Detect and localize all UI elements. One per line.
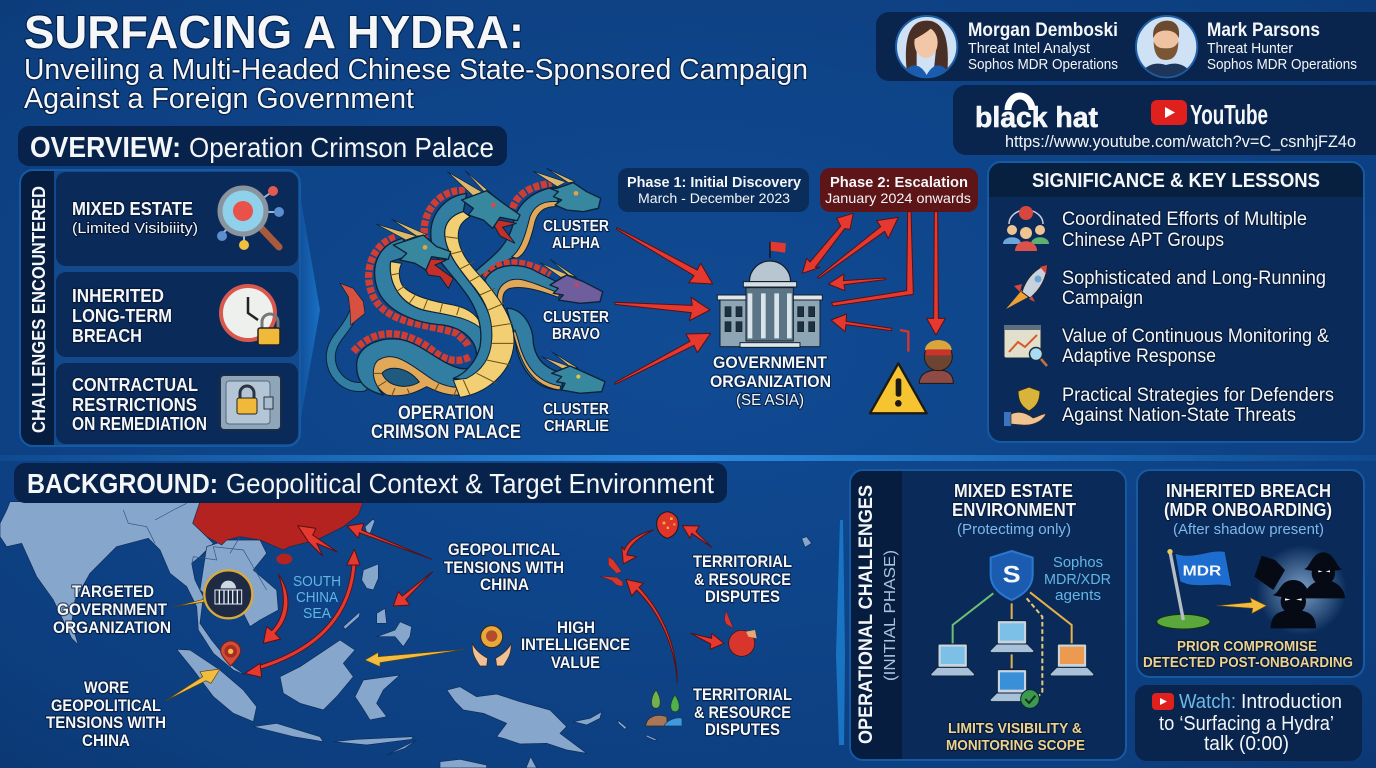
neck: cluster charlie xyxy=(507,308,563,390)
arrow: to Sumatra xyxy=(166,669,220,701)
phase 1 badge: March - December 2023 xyxy=(638,190,790,206)
icon: location pin xyxy=(221,641,241,666)
lesson: continuous monitoring xyxy=(1004,325,1329,367)
heading: overview: Operation Crimson Palace xyxy=(189,132,494,163)
icon: contested territory xyxy=(724,611,757,656)
heading: background xyxy=(14,463,727,503)
land: Pacific islands xyxy=(440,537,812,768)
challenge: inherited breach: BREACH xyxy=(72,326,142,346)
label: wore geopolitical tensions: GEOPOLITICAL xyxy=(51,696,161,715)
label: targeted government organization: TARGETED xyxy=(72,582,154,601)
arrow: double headed sea route xyxy=(245,549,360,677)
neck: left head xyxy=(369,237,487,380)
callout: watch introduction xyxy=(1135,685,1362,761)
label: sophos agents xyxy=(1044,554,1111,604)
label: targeted government organization: GOVERNMENT xyxy=(57,600,168,619)
arrow: to contested territory xyxy=(691,633,724,649)
label: sophos agents: Sophos xyxy=(1053,554,1103,571)
challenge: inherited breach: INHERITED xyxy=(72,286,164,306)
challenge: contractual restrictions xyxy=(56,363,298,444)
speaker text: Mark Parsons: Mark Parsons xyxy=(1207,20,1320,41)
challenge: mixed estate: (Limited Visibiiity) xyxy=(72,220,198,237)
head: cluster bravo xyxy=(540,259,603,303)
label: territorial disputes upper: DISPUTES xyxy=(705,587,780,606)
arrow: elbow from phase 2 xyxy=(832,212,913,306)
heading: mixed estate environment xyxy=(952,481,1076,538)
pointer: government xyxy=(174,599,204,607)
land: Hainan xyxy=(276,554,292,564)
map xyxy=(0,502,812,768)
heading: mixed estate environment: ENVIRONMENT xyxy=(952,500,1076,520)
panel: speakers xyxy=(876,12,1376,81)
label: cluster alpha: ALPHA xyxy=(552,235,600,252)
icon: spy silhouettes xyxy=(1254,552,1345,628)
label: government organization: GOVERNMENT xyxy=(713,353,828,372)
lesson: coordinated efforts: Coordinated Efforts of Multiple xyxy=(1062,209,1307,230)
challenge: contractual restrictions: CONTRACTUAL xyxy=(72,375,198,395)
challenge: inherited breach xyxy=(56,272,298,357)
icon: laptop bottom xyxy=(990,670,1034,702)
caption: limits visibility xyxy=(946,720,1085,754)
label: high intelligence value: HIGH xyxy=(557,618,595,637)
arrow: to Philippines xyxy=(393,572,433,606)
challenge: contractual restrictions: ON REMEDIATION xyxy=(72,414,207,434)
caption: prior compromise xyxy=(1143,638,1353,671)
icon: rocket xyxy=(1006,265,1047,309)
label: targeted government organization: ORGANIZATION xyxy=(53,618,171,637)
label: cluster charlie: CHARLIE xyxy=(544,418,609,435)
lesson: continuous monitoring: Adaptive Response xyxy=(1062,346,1216,367)
icon: MDR flag xyxy=(1157,549,1232,629)
label: cluster charlie: CLUSTER xyxy=(543,401,609,418)
label: sophos agents: MDR/XDR xyxy=(1044,571,1111,588)
lesson: practical strategies: Against Nation-State Threats xyxy=(1062,405,1296,426)
caption: prior compromise: DETECTED POST-ONBOARDING xyxy=(1143,654,1353,671)
label: operation crimson palace: OPERATION xyxy=(398,403,494,424)
title block xyxy=(24,6,808,115)
lesson: practical strategies xyxy=(1004,385,1334,426)
label: government organization xyxy=(710,353,831,409)
arrow: curved toward strait xyxy=(263,574,288,643)
caption: limits visibility: LIMITS VISIBILITY & xyxy=(948,720,1082,737)
icon: government building xyxy=(717,242,822,347)
label: wore geopolitical tensions: CHINA xyxy=(82,731,130,750)
icon: chart with magnifier xyxy=(1004,325,1047,366)
challenge: inherited breach: LONG-TERM xyxy=(72,306,172,326)
label: cluster bravo xyxy=(543,309,609,343)
speaker text: Mark Parsons: Sophos MDR Operations xyxy=(1207,56,1357,73)
vertical label: (INITIAL PHASE) xyxy=(882,550,899,681)
main title: SURFACING A HYDRA: xyxy=(24,6,524,58)
lesson: practical strategies: Practical Strategies for Defenders xyxy=(1062,385,1334,406)
label: cluster charlie xyxy=(543,401,609,435)
arrow: broken stub xyxy=(900,330,908,352)
land: New Guinea xyxy=(447,687,587,753)
avatar: Morgan Demboski xyxy=(896,16,957,80)
lesson: continuous monitoring: Value of Continuous Monitoring & xyxy=(1062,326,1329,347)
icon: hand with shield xyxy=(1004,387,1046,426)
phase 1 badge: Phase 1: Initial Discovery xyxy=(627,174,802,191)
land: Indochina east xyxy=(200,540,278,627)
label: wore geopolitical tensions: WORE xyxy=(84,678,129,697)
label: geopolitical tensions with china: CHINA xyxy=(480,575,529,594)
heading: inherited breach: INHERITED BREACH xyxy=(1166,481,1331,501)
heading: mixed estate environment: MIXED ESTATE xyxy=(954,481,1073,501)
heading: overview: OVERVIEW: xyxy=(30,132,181,164)
heading: background: Geopolitical Context & Target Environment xyxy=(226,468,714,499)
label: territorial disputes upper: TERRITORIAL xyxy=(693,552,792,571)
arrow: to China east coast xyxy=(347,523,432,559)
label: cluster alpha: CLUSTER xyxy=(543,218,609,235)
lesson: sophisticated campaign xyxy=(1006,265,1326,309)
head: cluster charlie xyxy=(542,352,605,393)
label: south china sea: SOUTH xyxy=(293,573,341,590)
speaker text: Mark Parsons: Threat Hunter xyxy=(1207,40,1293,57)
icon: clock and padlock xyxy=(221,286,280,345)
vertical label xyxy=(856,485,899,744)
disputed islands xyxy=(600,557,623,587)
label: south china sea: CHINA xyxy=(296,589,338,606)
head: main xyxy=(447,171,520,243)
icon: laptop right xyxy=(1050,644,1094,676)
vertical label: CHALLENGES ENCOUNTERED xyxy=(29,186,49,433)
land: China xyxy=(193,502,363,550)
arrow: alpha to government xyxy=(617,228,713,284)
label: south china sea xyxy=(293,573,341,622)
label: south china sea: SEA xyxy=(303,605,331,622)
label: high intelligence value: VALUE xyxy=(551,653,600,672)
label: cluster bravo: BRAVO xyxy=(552,326,600,343)
challenge: mixed estate: MIXED ESTATE xyxy=(72,199,193,219)
label: cluster bravo: CLUSTER xyxy=(543,309,609,326)
label: territorial disputes upper: & RESOURCE xyxy=(694,570,791,589)
phase 2 badge xyxy=(820,168,978,212)
icon: Sophos shield: S xyxy=(1003,561,1021,588)
arrow: bravo to government xyxy=(615,297,710,321)
label: cluster alpha xyxy=(543,218,609,252)
heading: background: BACKGROUND: xyxy=(27,468,218,499)
icon: red shield xyxy=(657,512,678,538)
phase 2 badge: Phase 2: Escalation xyxy=(830,174,968,191)
label: high intelligence value xyxy=(521,618,630,672)
head: left xyxy=(376,219,453,288)
watch text: talk (0:00) xyxy=(1204,733,1289,755)
glow behind spies xyxy=(1257,545,1347,635)
label: operation crimson palace: CRIMSON PALACE xyxy=(371,422,521,443)
icon: team xyxy=(1003,206,1049,251)
panel: operational challenges xyxy=(850,470,1126,760)
label: territorial disputes lower: DISPUTES xyxy=(705,720,780,739)
label: targeted government organization xyxy=(53,582,171,637)
heading: inherited breach xyxy=(1164,481,1332,538)
caption: prior compromise: PRIOR COMPROMISE xyxy=(1177,638,1317,655)
panel: inherited breach xyxy=(1137,470,1364,677)
label: geopolitical tensions with china xyxy=(444,540,564,594)
neck: main xyxy=(424,191,514,397)
arrow: shield to islands xyxy=(622,530,653,564)
illustration: flag and threat actors xyxy=(1157,545,1347,635)
icon: MDR flag: MDR xyxy=(1183,564,1222,580)
arrow: return to government xyxy=(828,274,885,291)
label: government organization: (SE ASIA) xyxy=(736,392,804,409)
arrow: phase 2 to government xyxy=(817,217,898,278)
label: geopolitical tensions with china: TENSIONS WITH xyxy=(444,558,564,577)
arrow: resources to islands xyxy=(626,579,677,683)
challenge: mixed estate xyxy=(56,172,298,266)
lower coil xyxy=(353,334,487,397)
icon: laptop left xyxy=(931,644,975,676)
logo: YouTube xyxy=(1151,99,1268,130)
icon: Sophos shield xyxy=(991,551,1033,600)
land: India and Indochina xyxy=(0,502,245,675)
arrow: charlie to government xyxy=(615,333,711,384)
section divider band xyxy=(0,455,1376,461)
label: operation crimson palace xyxy=(371,403,521,443)
label: territorial disputes lower: & RESOURCE xyxy=(694,703,791,722)
arrow: threat to government xyxy=(831,314,892,332)
icon: play button xyxy=(1152,693,1174,710)
label: wore geopolitical tensions xyxy=(46,678,166,750)
neck: cluster alpha xyxy=(473,183,558,277)
label: territorial disputes upper xyxy=(693,552,792,606)
icon: check badge xyxy=(1021,690,1039,708)
label: wore geopolitical tensions: TENSIONS WITH xyxy=(46,713,166,732)
speaker text: Morgan Demboski: Threat Intel Analyst xyxy=(968,40,1091,57)
logo: black hat: black hat xyxy=(975,102,1098,134)
video url: https://www.youtube.com/watch?v=C_csnhjFZ4o xyxy=(1005,132,1356,151)
icon: target government marker xyxy=(204,570,252,618)
label: territorial disputes lower: TERRITORIAL xyxy=(693,685,792,704)
arrow: flag to threat actors xyxy=(1217,598,1267,614)
icon: safe with padlock xyxy=(220,375,281,430)
label: sophos agents: agents xyxy=(1055,587,1101,604)
icon: natural resources xyxy=(646,690,682,726)
icon: hands with emblem xyxy=(472,626,511,666)
speaker text: Mark Parsons xyxy=(1207,20,1357,73)
attack diagram xyxy=(615,212,953,413)
panel heading: SIGNIFICANCE & KEY LESSONS xyxy=(1032,170,1320,192)
challenge: contractual restrictions: RESTRICTIONS xyxy=(72,395,197,415)
heading: overview xyxy=(18,126,507,166)
phase 1 badge xyxy=(618,168,809,212)
lesson: sophisticated campaign: Campaign xyxy=(1062,288,1143,309)
heading: mixed estate environment: (Protectimg only) xyxy=(957,521,1071,538)
arrow: phase 2 to threat actor xyxy=(927,212,945,335)
country borders xyxy=(123,503,267,590)
panel: challenges encountered xyxy=(20,170,320,446)
watch text xyxy=(1159,691,1342,755)
speaker text: Morgan Demboski xyxy=(968,20,1118,73)
label: geopolitical tensions with china: GEOPOLITICAL xyxy=(448,540,560,559)
speaker text: Morgan Demboski: Morgan Demboski xyxy=(968,20,1118,41)
watch text: to ‘Surfacing a Hydra’ xyxy=(1159,713,1334,735)
lesson: coordinated efforts: Chinese APT Groups xyxy=(1062,230,1224,251)
vertical label: OPERATIONAL CHALLENGES xyxy=(856,485,877,744)
icon: magnifier with nodes xyxy=(217,186,284,250)
heading: inherited breach: (After shadow present) xyxy=(1173,521,1324,538)
map east xyxy=(440,512,812,768)
land: islands xyxy=(177,519,417,755)
icon: threat actor xyxy=(919,340,953,383)
panel: significance and key lessons xyxy=(988,162,1364,442)
logo: YouTube: YouTube xyxy=(1190,99,1268,130)
network diagram xyxy=(931,551,1094,708)
icon: warning triangle xyxy=(870,363,927,413)
subtitle: Unveiling a Multi-Headed Chinese State-Sponsored Campaign xyxy=(24,54,808,86)
illustration: hydra xyxy=(331,168,605,397)
lesson: sophisticated campaign: Sophisticated and Long-Running xyxy=(1062,268,1326,289)
label: government organization: ORGANIZATION xyxy=(710,372,831,391)
subtitle: Against a Foreign Government xyxy=(24,83,414,115)
caption: limits visibility: MONITORING SCOPE xyxy=(946,737,1085,754)
icon: laptop top xyxy=(990,621,1034,653)
heading: inherited breach: (MDR ONBOARDING) xyxy=(1164,500,1332,520)
label: high intelligence value: INTELLIGENCE xyxy=(521,635,630,654)
watch text: Introduction xyxy=(1241,691,1342,713)
chevron stripe xyxy=(836,520,845,745)
phase 2 badge: January 2024 onwards xyxy=(825,190,971,206)
label: territorial disputes lower xyxy=(693,685,792,739)
lesson: coordinated efforts xyxy=(1003,206,1307,251)
connector lines xyxy=(953,592,1072,698)
head: cluster alpha xyxy=(533,168,601,212)
arrow: disputes to shield xyxy=(682,526,712,547)
watch text: Watch: xyxy=(1179,691,1236,713)
map land west xyxy=(0,502,465,755)
arrow: intelligence value xyxy=(365,649,465,667)
avatar: Mark Parsons xyxy=(1136,16,1197,80)
subtitle xyxy=(24,54,808,115)
arrow: to China south coast xyxy=(298,526,337,556)
speaker text: Morgan Demboski: Sophos MDR Operations xyxy=(968,56,1118,73)
panel: video source xyxy=(953,85,1376,155)
arrow: phase 2 double headed xyxy=(802,213,853,273)
tail xyxy=(331,283,365,387)
neck: cluster bravo xyxy=(485,263,560,307)
